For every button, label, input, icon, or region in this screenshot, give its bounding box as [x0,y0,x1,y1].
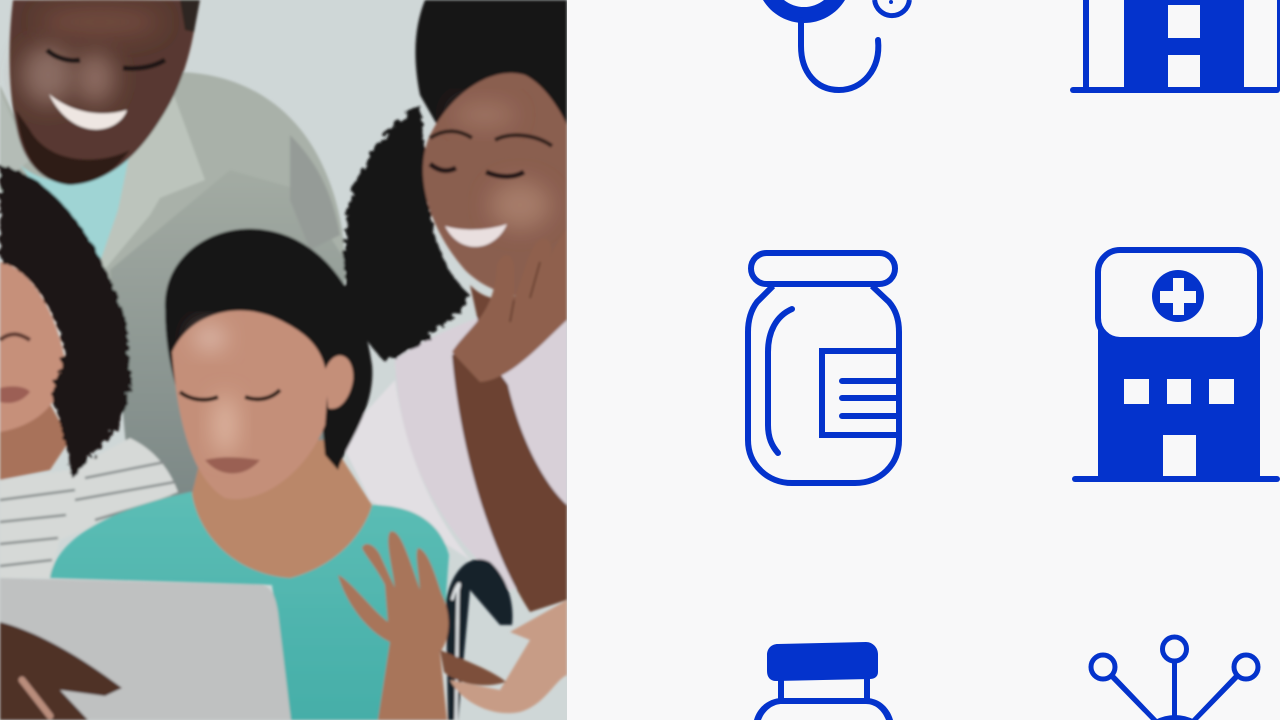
photo: family looking at a laptop [0,0,567,720]
girl's fingers [440,650,506,685]
icon: medicine jar with label [748,253,899,483]
hand on laptop [0,622,122,720]
woman with curly hair [340,0,567,612]
girl's raised hand [338,531,449,720]
icon: stethoscope [763,0,909,90]
adult's hand [450,600,567,713]
icon: hospital with cross [1075,250,1277,482]
man in grey shirt [0,0,345,520]
wheelchair handle [446,559,513,720]
centre girl in teal shirt [50,229,449,720]
girl on the left [0,165,178,578]
icon: connected network nodes, cropped at bottom [1091,637,1258,720]
icon: hospital building, cropped at top [1073,0,1280,90]
laptop [0,578,291,720]
icon: pill bottle, cropped at bottom [754,642,893,720]
